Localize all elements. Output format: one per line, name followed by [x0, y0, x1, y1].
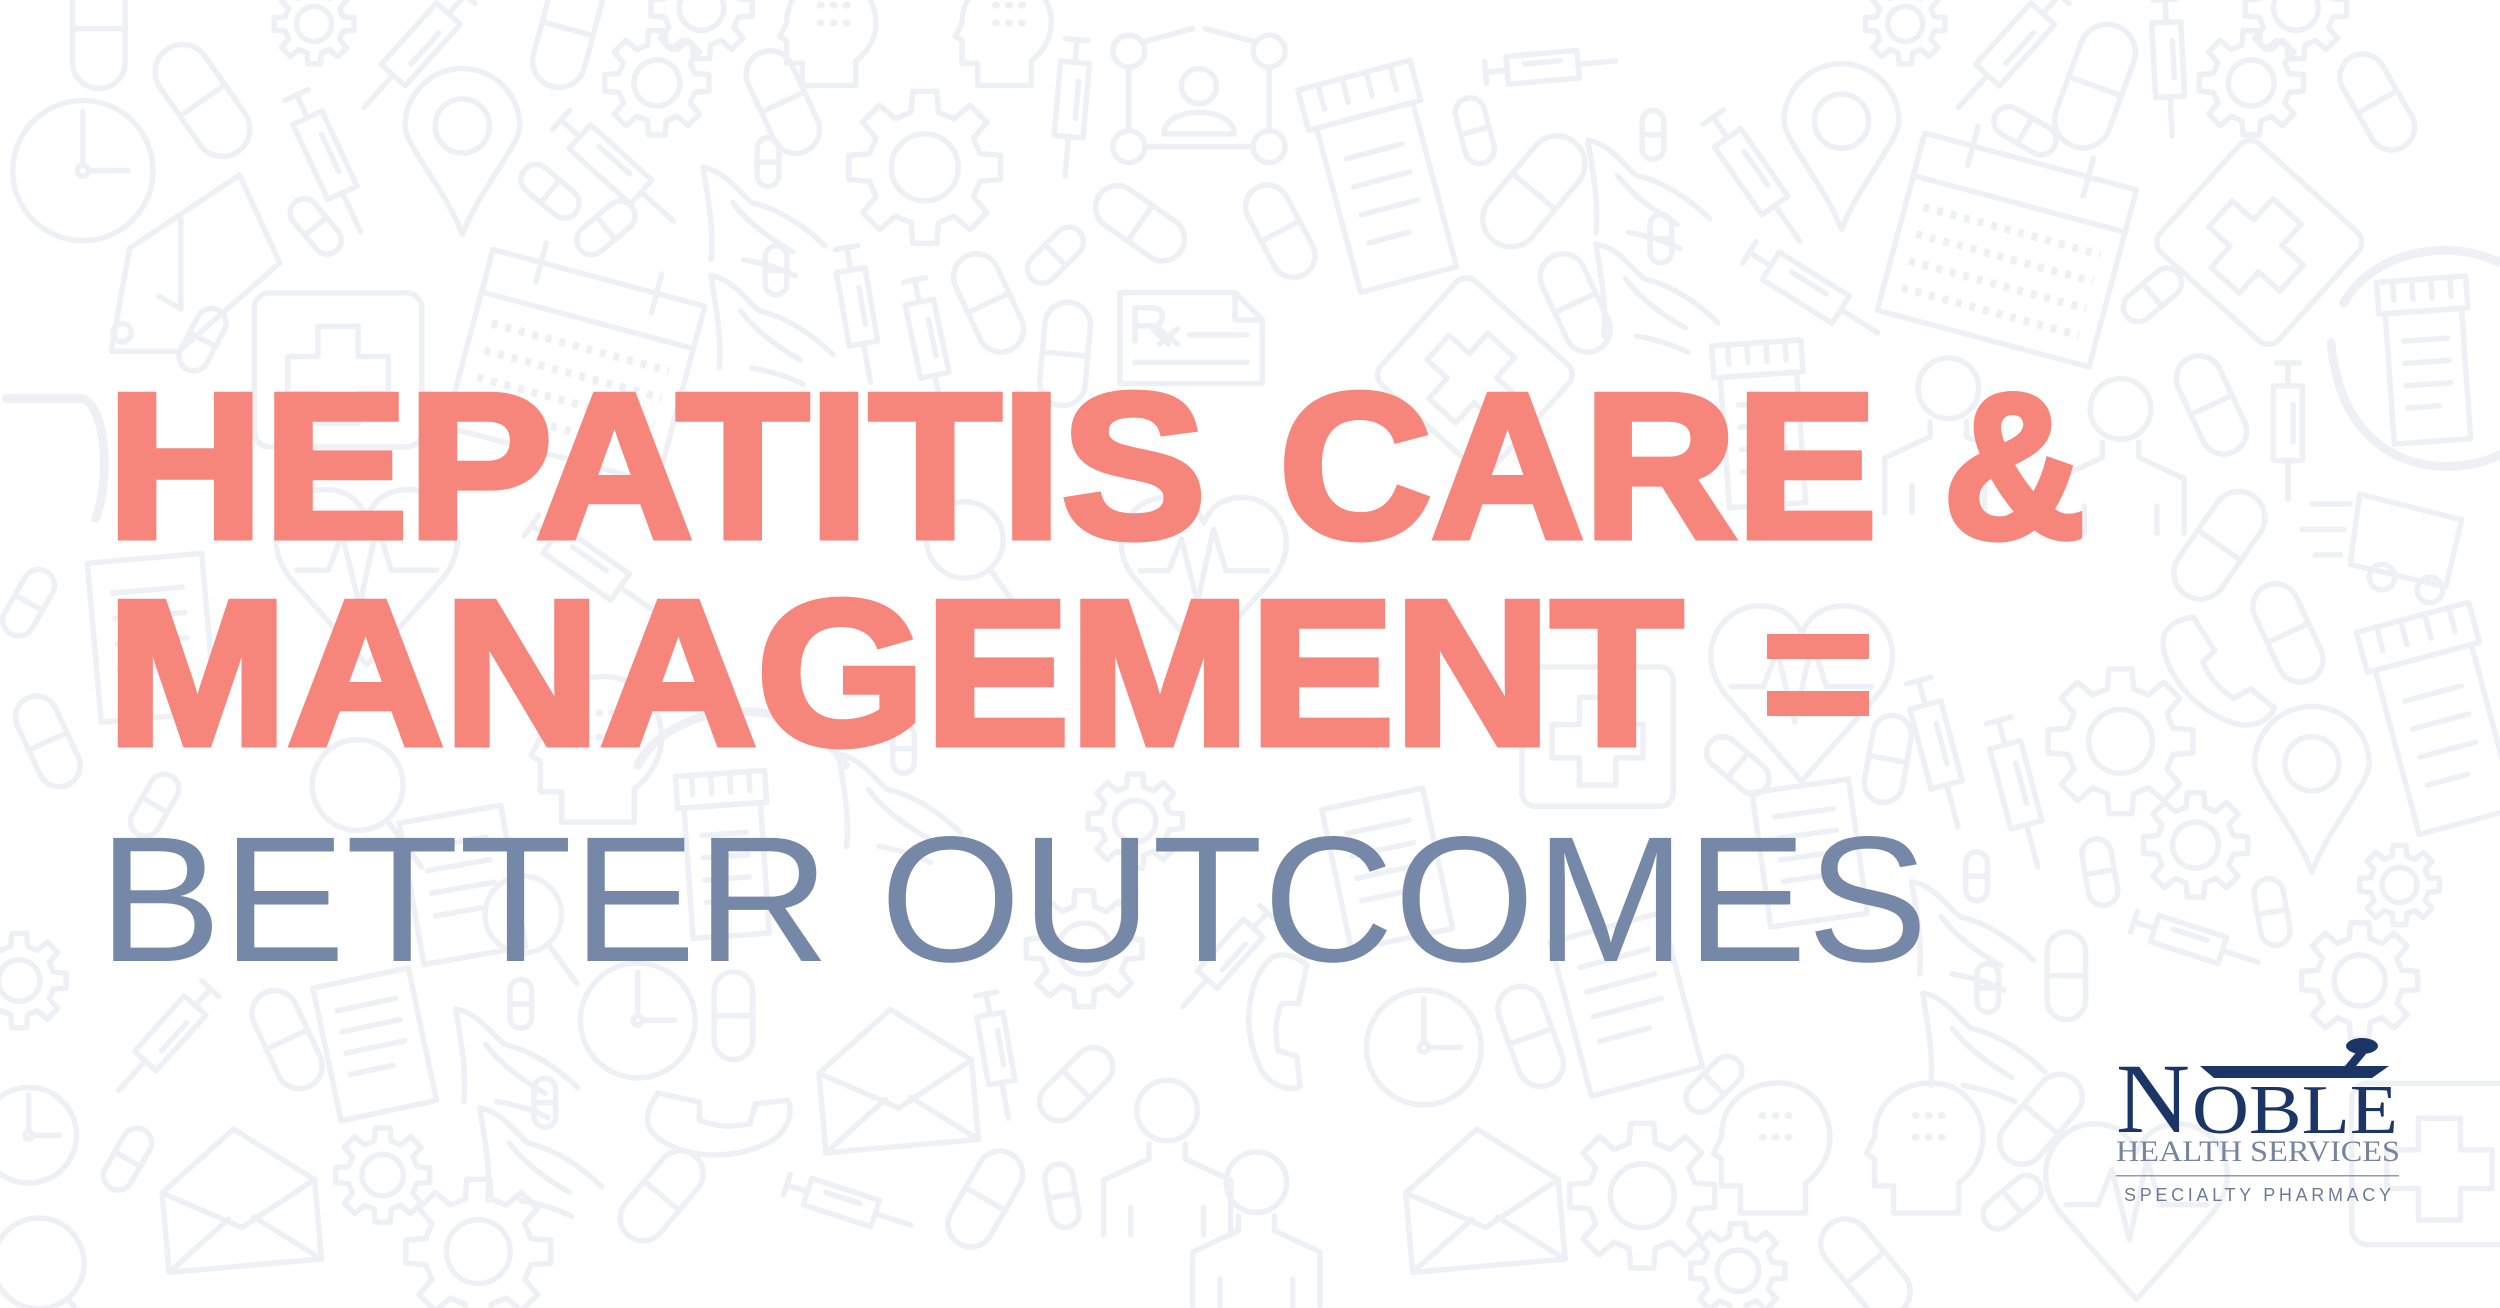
title: Hepatitis Care & [107, 351, 2085, 581]
logo wordmark: Noble: N [2116, 1043, 2190, 1154]
title: Hepatitis Care &: & [1943, 351, 2085, 581]
logo wordmark: Noble: OBLE [2192, 1072, 2398, 1149]
title: Hepatitis Care &: CARE [1279, 351, 1877, 581]
subtitle: Better Outcomes: OUTCOMES [880, 799, 1928, 999]
logo line: Health Services: HEALTH SERVICES [2116, 1135, 2400, 1168]
subtitle: Better Outcomes [98, 799, 1928, 999]
title: Hepatitis Care &: HEPATITIS [107, 351, 1206, 581]
icon: mortar pestle bar [2200, 1038, 2389, 1078]
title: Management =: MANAGEMENT [107, 558, 1683, 788]
logo wordmark: Noble [2116, 1043, 2398, 1154]
logo: Noble Health Services Specialty Pharmacy [2116, 1038, 2400, 1205]
logo tagline: Specialty Pharmacy: SPECIALTY PHARMACY [2124, 1185, 2391, 1205]
subtitle: Better Outcomes: BETTER [98, 799, 830, 999]
